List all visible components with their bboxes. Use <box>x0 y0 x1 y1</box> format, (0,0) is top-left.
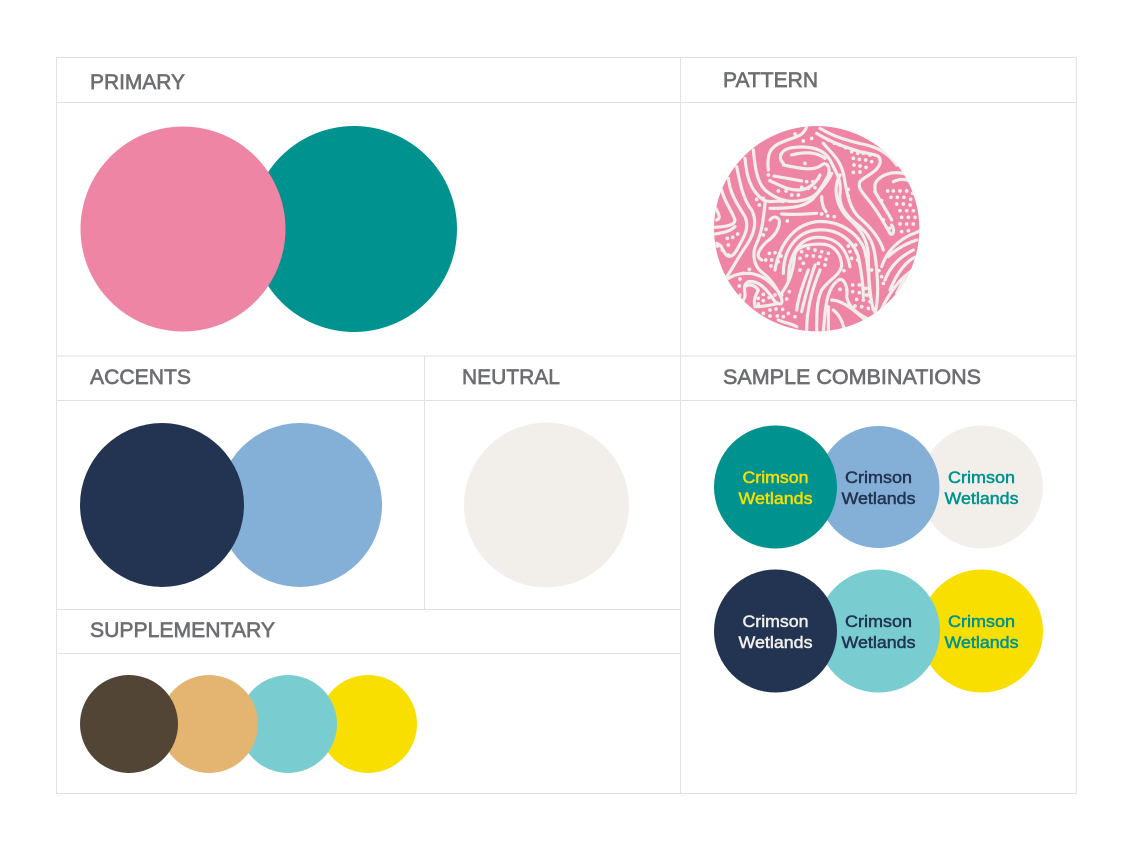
sample combination row 2: Wetlands <box>842 633 916 652</box>
neutral colour swatch <box>464 422 629 588</box>
sample combination row 2: Wetlands <box>944 633 1018 652</box>
sample combination row 1: Crimson <box>845 468 912 487</box>
sample combination row 1: Wetlands <box>944 489 1018 508</box>
accent colour swatches <box>80 423 382 587</box>
heading: pattern: PATTERN <box>723 69 818 92</box>
heading: accents: ACCENTS <box>90 366 191 389</box>
sample combination row 2: Crimson <box>845 612 912 631</box>
sample combination row 2: Wetlands <box>738 633 812 652</box>
sample combination row 1: Crimson <box>948 468 1015 487</box>
heading: supplementary: SUPPLEMENTARY <box>90 619 275 642</box>
heading: sample combinations: SAMPLE COMBINATIONS <box>723 366 981 389</box>
sample combination row 2: Crimson <box>742 612 808 631</box>
sample combination row 2: Crimson <box>948 612 1015 631</box>
heading: primary: PRIMARY <box>90 71 185 94</box>
sample combination row 1: Wetlands <box>842 489 916 508</box>
sample combination row 1: Crimson <box>742 468 808 487</box>
sample combination row 1 <box>714 426 1043 548</box>
supplementary colour swatches <box>80 675 417 773</box>
primary colour swatches <box>80 126 457 332</box>
sample combination row 2 <box>714 570 1043 692</box>
sample combination row 1: Wetlands <box>738 489 812 508</box>
heading: neutral: NEUTRAL <box>462 366 560 389</box>
pattern swatch <box>714 126 922 333</box>
